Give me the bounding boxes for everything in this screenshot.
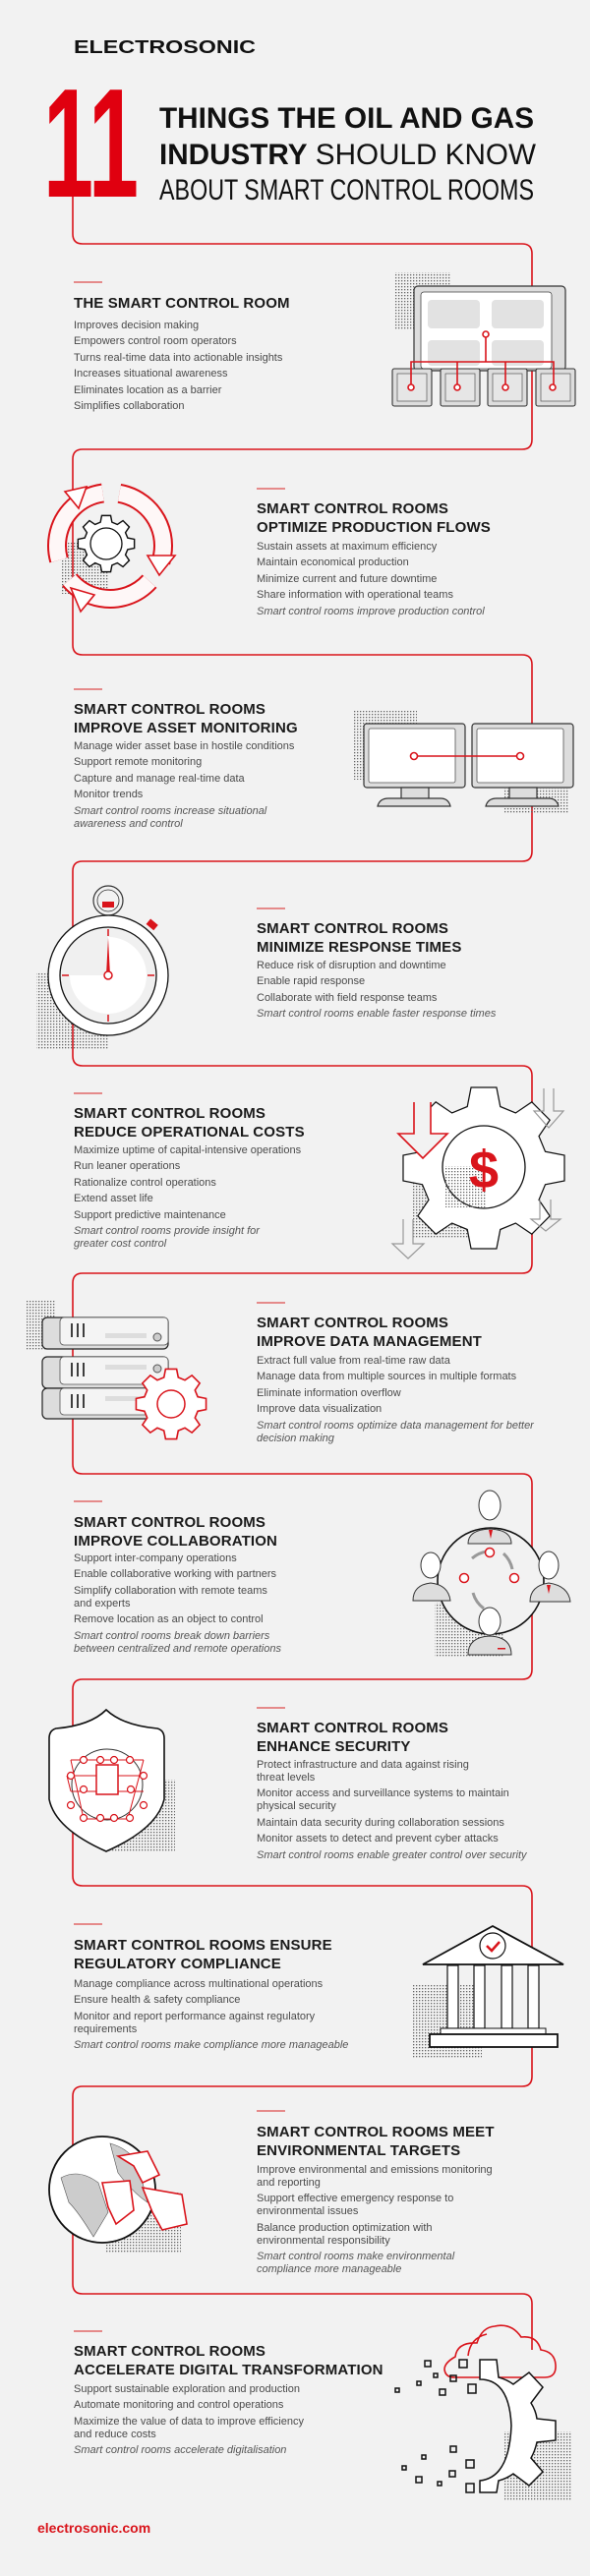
section 7: improve collaboration: Simplify collaboration with remote teams: [74, 1585, 267, 1597]
section 8: enhance security: physical security: [257, 1800, 336, 1812]
section 1: the smart control room: [74, 281, 290, 412]
section 8: enhance security: Monitor access and surveillance systems to maintain: [257, 1787, 509, 1799]
section 7: improve collaboration: Support inter-company operations: [74, 1551, 237, 1563]
section 4: minimize response times: MINIMIZE RESPONSE TIMES: [257, 938, 461, 956]
section 4: minimize response times: Smart control rooms enable faster response times: [257, 1008, 496, 1020]
section 3: improve asset monitoring: Capture and manage real-time data: [74, 773, 245, 785]
section 5: reduce operational costs: Support predictive maintenance: [74, 1209, 226, 1221]
section 11: accelerate digital transformation: and reduce costs: [74, 2429, 156, 2440]
section 5: reduce operational costs: Rationalize control operations: [74, 1177, 216, 1189]
icon: gear with dollar and arrows: $: [469, 1141, 499, 1200]
icon: two monitors: [353, 711, 573, 814]
section 10: meet environmental targets: Improve environmental and emissions monitoring: [257, 2163, 493, 2175]
section 2: optimize production flows: Smart control rooms improve production control: [257, 606, 485, 617]
icon: regulatory building: [413, 1926, 563, 2058]
section 7: improve collaboration: SMART CONTROL ROOMS: [74, 1514, 266, 1530]
section 5: reduce operational costs: greater cost control: [74, 1238, 166, 1250]
section 5: reduce operational costs: Smart control rooms provide insight for: [74, 1225, 260, 1237]
icon: production cycle arrows with gear: [48, 484, 175, 612]
section 2: optimize production flows: Share information with operational teams: [257, 589, 453, 601]
section 10: meet environmental targets: environmental responsibility: [257, 2235, 390, 2247]
section 1: the smart control room: Eliminates location as a barrier: [74, 384, 221, 396]
section 3: improve asset monitoring: Monitor trends: [74, 789, 143, 800]
section 7: improve collaboration: IMPROVE COLLABORATION: [74, 1532, 277, 1550]
section 1: the smart control room: Empowers control room operators: [74, 335, 237, 347]
section 9: ensure regulatory compliance: Smart control rooms make compliance more manageable: [74, 2039, 348, 2051]
section 6: improve data management: Manage data from multiple sources in multiple formats: [257, 1371, 516, 1382]
section 8: enhance security: ENHANCE SECURITY: [257, 1738, 411, 1754]
icon: servers with red gear: [27, 1300, 206, 1439]
section 1: the smart control room: THE SMART CONTROL ROOM: [74, 295, 290, 311]
section 5: reduce operational costs: Maximize uptime of capital-intensive operations: [74, 1144, 301, 1156]
section 11: accelerate digital transformation: [74, 2330, 384, 2456]
section 6: improve data management: Eliminate information overflow: [257, 1387, 401, 1399]
section 5: reduce operational costs: Run leaner operations: [74, 1160, 180, 1172]
section 9: ensure regulatory compliance: Monitor and report performance against regulatory: [74, 2011, 315, 2022]
section 5: reduce operational costs: SMART CONTROL ROOMS: [74, 1105, 266, 1121]
section 2: optimize production flows: SMART CONTROL ROOMS: [257, 499, 448, 517]
section 4: minimize response times: SMART CONTROL ROOMS: [257, 920, 448, 936]
section 2: optimize production flows: OPTIMIZE PRODUCTION FLOWS: [257, 519, 491, 535]
section 7: improve collaboration: Remove location as an object to control: [74, 1613, 264, 1625]
section 3: improve asset monitoring: [74, 688, 298, 830]
section 7: improve collaboration: Smart control rooms break down barriers: [74, 1630, 269, 1642]
section 7: improve collaboration: Enable collaborative working with partners: [74, 1568, 276, 1580]
title: INDUSTRY SHOULD KNOW: [159, 139, 537, 171]
section 6: improve data management: SMART CONTROL ROOMS: [257, 1314, 448, 1331]
section 8: enhance security: Maintain data security during collaboration sessions: [257, 1817, 504, 1829]
icon: control room video wall: [392, 272, 575, 406]
section 9: ensure regulatory compliance: Manage compliance across multinational operations: [74, 1978, 323, 1990]
section 10: meet environmental targets: and reporting: [257, 2177, 321, 2189]
section 11: accelerate digital transformation: Automate monitoring and control operations: [74, 2399, 283, 2411]
title: [159, 102, 537, 206]
section 8: enhance security: SMART CONTROL ROOMS: [257, 1719, 448, 1736]
section 11: accelerate digital transformation: ACCELERATE DIGITAL TRANSFORMATION: [74, 2362, 384, 2377]
section 9: ensure regulatory compliance: requirements: [74, 2023, 137, 2035]
section 1: the smart control room: Simplifies collaboration: [74, 400, 185, 412]
section 10: meet environmental targets: Balance production optimization with: [257, 2222, 433, 2234]
icon: stopwatch: [36, 886, 168, 1050]
section 10: meet environmental targets: SMART CONTROL ROOMS MEET: [257, 2124, 495, 2139]
section 4: minimize response times: [257, 907, 496, 1020]
section 11: accelerate digital transformation: Smart control rooms accelerate digitalisation: [74, 2444, 286, 2456]
big number 11: 11: [43, 57, 139, 230]
icon: cloud and digital gear: [395, 2325, 571, 2500]
section 10: meet environmental targets: environmental issues: [257, 2205, 358, 2217]
section 8: enhance security: Protect infrastructure and data against rising: [257, 1758, 469, 1770]
section 1: the smart control room: Increases situational awareness: [74, 368, 228, 380]
section 11: accelerate digital transformation: Support sustainable exploration and production: [74, 2383, 300, 2395]
section 10: meet environmental targets: compliance more manageable: [257, 2263, 401, 2275]
section 6: improve data management: [257, 1302, 535, 1444]
icon: gear with dollar and arrows: [392, 1087, 564, 1259]
section 3: improve asset monitoring: Support remote monitoring: [74, 756, 202, 768]
section 3: improve asset monitoring: SMART CONTROL ROOMS: [74, 700, 266, 718]
section 7: improve collaboration: and experts: [74, 1598, 130, 1610]
section 2: optimize production flows: [257, 488, 491, 617]
section 10: meet environmental targets: Support effective emergency response to: [257, 2193, 453, 2204]
section 2: optimize production flows: Maintain economical production: [257, 556, 409, 568]
section 8: enhance security: threat levels: [257, 1772, 315, 1784]
section 6: improve data management: IMPROVE DATA MANAGEMENT: [257, 1333, 482, 1349]
section 8: enhance security: Monitor assets to detect and prevent cyber attacks: [257, 1833, 499, 1844]
section 4: minimize response times: Enable rapid response: [257, 975, 365, 987]
section 6: improve data management: Smart control rooms optimize data management for better: [257, 1420, 534, 1432]
section 11: accelerate digital transformation: Maximize the value of data to improve efficiency: [74, 2416, 304, 2428]
section 1: the smart control room: Turns real-time data into actionable insights: [74, 352, 282, 364]
section 11: accelerate digital transformation: SMART CONTROL ROOMS: [74, 2342, 266, 2360]
section 1: the smart control room: Improves decision making: [74, 319, 199, 330]
section 5: reduce operational costs: Extend asset life: [74, 1193, 153, 1204]
section 2: optimize production flows: Minimize current and future downtime: [257, 573, 437, 585]
section 7: improve collaboration: [74, 1500, 281, 1655]
title: THINGS THE OIL AND GAS: [159, 102, 534, 135]
section 4: minimize response times: Collaborate with field response teams: [257, 992, 437, 1004]
section 4: minimize response times: Reduce risk of disruption and downtime: [257, 960, 446, 971]
section 10: meet environmental targets: [257, 2110, 495, 2275]
section 5: reduce operational costs: [74, 1092, 305, 1250]
icon: security shield: [49, 1710, 175, 1851]
icon: globe with recycle arrows: [49, 2137, 187, 2254]
section 9: ensure regulatory compliance: SMART CONTROL ROOMS ENSURE: [74, 1937, 332, 1953]
section 6: improve data management: Extract full value from real-time raw data: [257, 1355, 450, 1367]
section 10: meet environmental targets: Smart control rooms make environmental: [257, 2251, 454, 2262]
section 9: ensure regulatory compliance: REGULATORY COMPLIANCE: [74, 1955, 281, 1972]
section 10: meet environmental targets: ENVIRONMENTAL TARGETS: [257, 2141, 460, 2159]
section 3: improve asset monitoring: IMPROVE ASSET MONITORING: [74, 720, 298, 735]
red connector path: [73, 197, 532, 2350]
section 8: enhance security: Smart control rooms enable greater control over security: [257, 1849, 527, 1861]
section 6: improve data management: Improve data visualization: [257, 1403, 382, 1415]
logo: ELECTROSONIC: [74, 37, 256, 57]
section 2: optimize production flows: Sustain assets at maximum efficiency: [257, 541, 437, 553]
section 6: improve data management: decision making: [257, 1433, 334, 1444]
section 8: enhance security: [257, 1707, 527, 1861]
section 9: ensure regulatory compliance: Ensure health & safety compliance: [74, 1994, 240, 2006]
section 3: improve asset monitoring: Smart control rooms increase situational: [74, 805, 266, 817]
section 3: improve asset monitoring: awareness and control: [74, 818, 183, 830]
footer url: electrosonic.com: [37, 2520, 150, 2536]
section 7: improve collaboration: between centralized and remote operations: [74, 1643, 281, 1655]
section 9: ensure regulatory compliance: [74, 1923, 348, 2051]
section 3: improve asset monitoring: Manage wider asset base in hostile conditions: [74, 739, 294, 751]
section 5: reduce operational costs: REDUCE OPERATIONAL COSTS: [74, 1123, 305, 1141]
icon: collaboration people: [413, 1491, 570, 1658]
